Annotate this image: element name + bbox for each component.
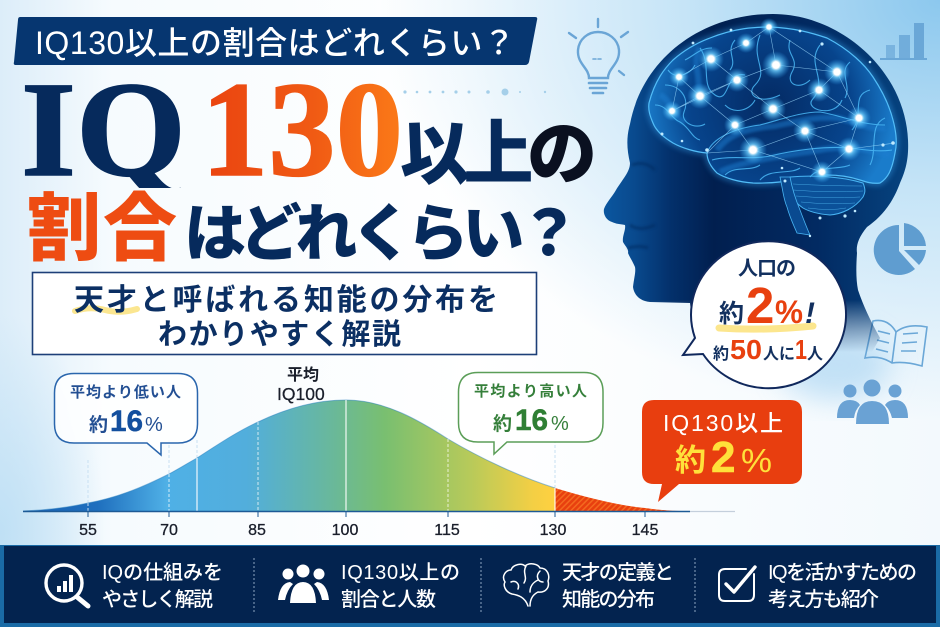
text: 人: 人 bbox=[807, 340, 823, 364]
axis fade bbox=[690, 510, 735, 512]
footer item 2 bbox=[278, 561, 460, 611]
highlight band bbox=[719, 326, 813, 329]
text: 1: 1 bbox=[795, 334, 807, 365]
red tail bbox=[555, 488, 686, 511]
internal lines bbox=[88, 422, 448, 511]
decorative dots row bbox=[403, 88, 546, 96]
icon: pie chart bbox=[874, 223, 926, 275]
facial shading bbox=[628, 163, 655, 248]
callout value: %: % bbox=[551, 413, 569, 435]
cerebellum bbox=[790, 176, 865, 215]
callout label: IQ130以上 bbox=[663, 410, 783, 436]
callout label: 平均より低い人 bbox=[70, 381, 181, 402]
mean lines bbox=[197, 400, 555, 511]
glowing nodes bbox=[662, 18, 871, 183]
footer item 4 bbox=[719, 561, 917, 611]
text: 人に: 人に bbox=[763, 340, 795, 364]
text: 約: 約 bbox=[719, 294, 744, 330]
icon: bar chart bbox=[880, 23, 927, 60]
callout value: 約: 約 bbox=[493, 409, 512, 436]
text: 知能の分布 bbox=[562, 588, 655, 611]
mean label: IQ100 bbox=[277, 384, 325, 404]
text: IQ130以上の bbox=[341, 561, 460, 584]
subtitle line 1: 天才と呼ばれる知能の分布を bbox=[74, 275, 498, 319]
text: !: ! bbox=[805, 297, 815, 330]
head silhouette bbox=[604, 14, 908, 350]
bubble shape bbox=[683, 241, 846, 388]
text: 考え方も紹介 bbox=[768, 588, 879, 611]
callout value: %: % bbox=[741, 442, 772, 479]
subtitle box bbox=[32, 272, 536, 354]
callout value: 約: 約 bbox=[89, 410, 108, 437]
icon: magnifier chart bbox=[46, 565, 88, 606]
footer item 1 bbox=[46, 561, 223, 611]
title: IQ: IQ bbox=[21, 55, 186, 205]
text: 約 (line 3): 約 bbox=[713, 340, 729, 364]
axis labels: 70 bbox=[160, 522, 178, 539]
mean label: 平均 bbox=[287, 361, 319, 385]
neural network lines bbox=[672, 27, 895, 172]
icon: checkbox bbox=[719, 567, 755, 601]
subtitle line 2: わかりやすく解説 bbox=[158, 311, 401, 353]
brain lobes bbox=[649, 27, 896, 183]
icon: brain outline bbox=[504, 564, 549, 606]
icon: people group bbox=[837, 380, 908, 424]
cerebellum lines bbox=[793, 184, 863, 210]
icon: people bbox=[278, 564, 329, 603]
axis bbox=[23, 510, 690, 512]
main title bbox=[24, 84, 593, 262]
bell curve chart bbox=[23, 361, 735, 539]
brain bbox=[649, 27, 896, 237]
brain stem bbox=[780, 177, 810, 235]
axis labels: 85 bbox=[248, 522, 266, 539]
text: 割合と人数 bbox=[341, 588, 436, 611]
callout label: 平均より高い人 bbox=[474, 380, 587, 401]
gyri folds bbox=[655, 35, 892, 180]
text: IQの仕組みを bbox=[102, 561, 223, 584]
text: 2: 2 bbox=[746, 277, 774, 334]
head silhouette with brain bbox=[604, 14, 908, 350]
footer item 3 bbox=[504, 561, 674, 611]
axis labels: 130 bbox=[540, 522, 566, 539]
mean label bbox=[277, 361, 325, 404]
text: やさしく解説 bbox=[102, 588, 213, 611]
axis ticks bbox=[88, 511, 645, 517]
title: はどれくらい？: はどれくらい？ bbox=[184, 183, 580, 273]
lit lobes bbox=[660, 48, 890, 172]
footer band bbox=[0, 545, 940, 627]
top banner bbox=[14, 17, 537, 65]
axis labels: 55 bbox=[79, 522, 97, 539]
curve area bbox=[23, 400, 555, 511]
callout value: 16: 16 bbox=[110, 405, 143, 438]
axis labels bbox=[79, 522, 658, 539]
callout value: 2: 2 bbox=[711, 433, 735, 482]
axis labels: 115 bbox=[434, 522, 460, 539]
text: 50: 50 bbox=[730, 334, 762, 365]
highlight underline bbox=[75, 308, 137, 312]
callout value: 16: 16 bbox=[515, 404, 548, 437]
small sparks bbox=[660, 29, 895, 237]
callout value: 約: 約 bbox=[675, 435, 706, 480]
callout: population bbox=[683, 241, 846, 388]
axis labels: 145 bbox=[632, 522, 658, 539]
icon: light bulb bbox=[569, 19, 628, 93]
text: 天才の定義と bbox=[562, 561, 674, 584]
callout value: %: % bbox=[145, 414, 163, 436]
text: 人口の: 人口の bbox=[738, 252, 796, 281]
axis labels: 100 bbox=[332, 522, 358, 539]
callout: IQ130 or above bbox=[642, 400, 802, 502]
title: 130: 130 bbox=[201, 55, 403, 205]
top banner: IQ130以上の割合はどれくらい？ bbox=[35, 25, 515, 61]
title: 割合: 割合 bbox=[27, 169, 177, 276]
callout: lower than average bbox=[54, 374, 198, 455]
icon: open book bbox=[865, 320, 927, 366]
guide lines above curve bbox=[88, 440, 555, 503]
curve highlight bbox=[23, 400, 555, 511]
callout: higher than average bbox=[458, 372, 603, 454]
brain glow bbox=[649, 27, 896, 183]
text: %: % bbox=[775, 294, 803, 330]
text: IQを活かすための bbox=[768, 561, 917, 584]
title: 以上の: 以上の bbox=[400, 98, 597, 199]
